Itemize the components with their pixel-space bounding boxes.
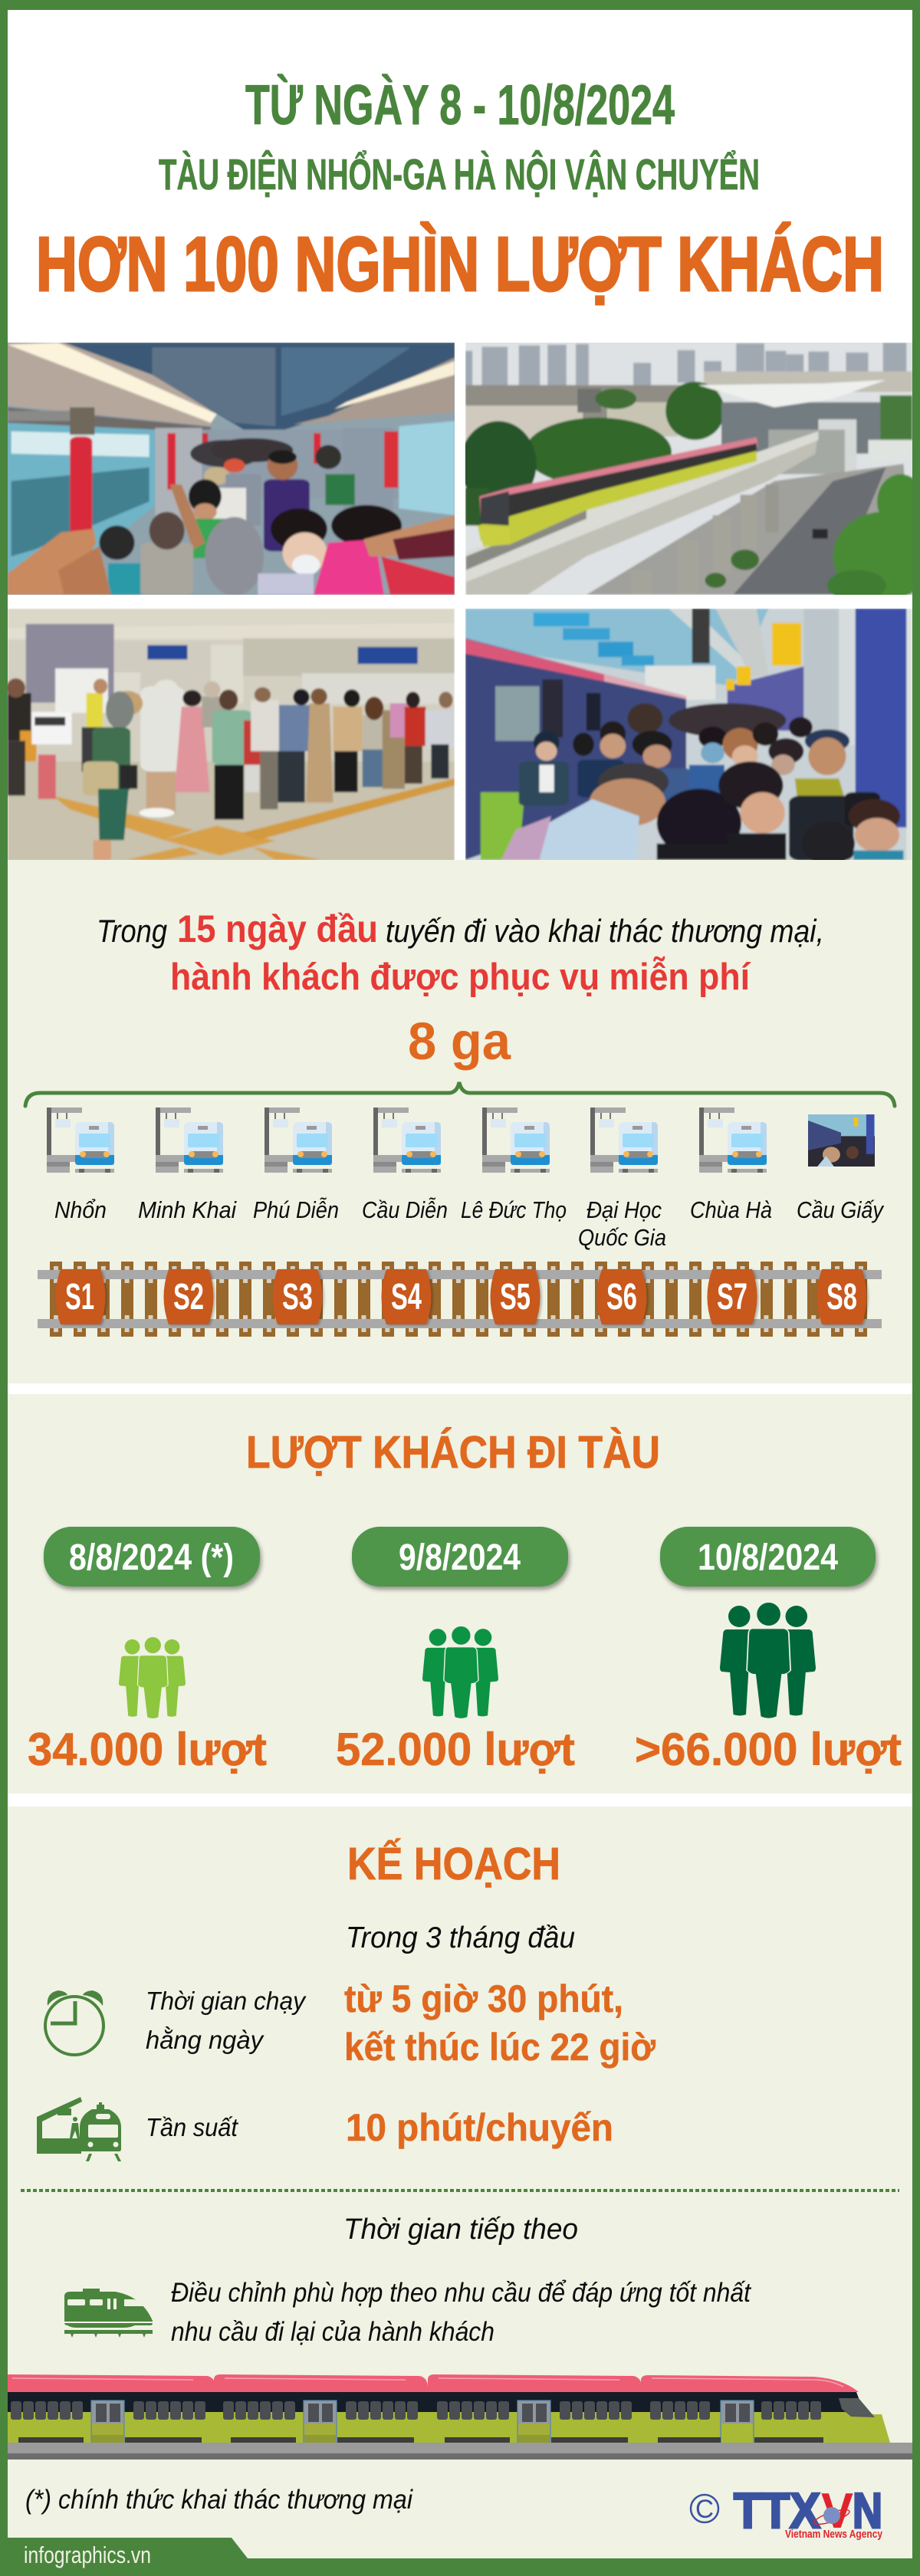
count 34.000: 34.000 lượt: [28, 1724, 267, 1775]
heading: 8 stations: 8 ga: [408, 1012, 511, 1071]
panel: passenger counts: [8, 1394, 912, 1793]
intro text line 1: Trong: [97, 913, 167, 949]
title: [36, 74, 884, 307]
label: frequency: Tần suất: [146, 2113, 239, 2141]
crowd: [190, 440, 261, 468]
footer tab: source: infographics.vn: [24, 2542, 151, 2568]
illustration: metro train: [2, 2374, 912, 2460]
station badges: S3: [282, 1277, 313, 1318]
brace: [25, 1082, 895, 1106]
station labels: Cầu Giấy: [797, 1196, 885, 1223]
station labels: [54, 1196, 885, 1251]
logo: TTXVN: N: [853, 2482, 882, 2538]
heading: passenger counts: LƯỢT KHÁCH ĐI TÀU: [246, 1427, 660, 1478]
icon: alarm clock: [45, 1990, 104, 2055]
icon: station Cầu Diễn: [373, 1108, 441, 1173]
count 52.000: 52.000 lượt: [336, 1724, 575, 1775]
date pill 10/8/2024: [660, 1527, 876, 1587]
footnote: (*) chính thức khai thác thương mại: [25, 2485, 413, 2515]
station badges: S1: [65, 1277, 94, 1318]
logo: TTXVN: V: [821, 2482, 853, 2538]
icon: station Minh Khai: [156, 1108, 223, 1173]
station labels: Cầu Diễn: [362, 1196, 448, 1223]
label: daily running time: hằng ngày: [146, 2026, 264, 2054]
trees right: [833, 512, 920, 601]
panel: plan: [2, 1806, 912, 2558]
icon: train side view: [64, 2289, 153, 2338]
count 66.000: >66.000 lượt: [635, 1724, 902, 1775]
label: daily running time: Thời gian chạy: [146, 1987, 307, 2015]
icon: platform and train: [37, 2097, 121, 2161]
logo: TTXVN: TTX: [734, 2482, 820, 2538]
white inner area: [8, 10, 912, 860]
train: [465, 638, 686, 860]
text: adjust to demand: Điều chỉnh phù hợp theo nhu cầu để đáp ứng tốt nhất: [171, 2278, 751, 2308]
icon: people light green: [119, 1637, 186, 1718]
intro text line 1: [97, 907, 824, 950]
photo: crowd on the platform: [465, 609, 912, 860]
icon: station Phú Diễn: [264, 1108, 332, 1173]
station labels: Minh Khai: [138, 1196, 237, 1223]
intro text line 2: hành khách được phục vụ miễn phí: [170, 957, 751, 998]
icon: people dark green: [720, 1603, 816, 1718]
logo: TTXVN: C: [695, 2495, 714, 2524]
icon: station Nhổn: [47, 1108, 114, 1173]
photo: passengers queuing in station hall: [8, 609, 455, 860]
date pill 9/8/2024: 9/8/2024: [399, 1537, 521, 1578]
value: running hours: từ 5 giờ 30 phút,: [344, 1977, 623, 2020]
icon: station Chùa Hà: [699, 1108, 767, 1173]
value: running hours: [344, 1977, 656, 2069]
photo: crowded train interior: [8, 343, 455, 595]
white gap: [8, 1383, 912, 1394]
station badges: S7: [717, 1277, 748, 1318]
station labels: Đại Học: [586, 1196, 662, 1223]
floor: [8, 761, 455, 861]
intro text line 1: tuyến đi vào khai thác thương mại,: [386, 913, 824, 949]
station labels: Chùa Hà: [690, 1196, 772, 1223]
train: [479, 437, 758, 517]
panel: free service and stations: [8, 860, 912, 1383]
station badges: S2: [173, 1277, 204, 1318]
text: adjust to demand: [171, 2278, 751, 2347]
subheading: first three months: Trong 3 tháng đầu: [346, 1921, 575, 1954]
icon: people medium green: [422, 1626, 498, 1718]
station labels: Lê Đức Thọ: [461, 1196, 567, 1223]
intro text line 1: 15 ngày đầu: [177, 907, 378, 950]
value: frequency: 10 phút/chuyến: [346, 2106, 613, 2149]
logo: TTXVN: Vietnam News Agency: [785, 2528, 883, 2541]
footer tab: source: [0, 2538, 248, 2576]
station labels: Phú Diễn: [253, 1196, 339, 1223]
date pill 10/8/2024: 10/8/2024: [698, 1537, 838, 1578]
icon: station Lê Đức Thọ: [482, 1108, 550, 1173]
logo: TTXVN: [691, 2482, 883, 2541]
icon: station Cầu Giấy photo: [808, 1114, 875, 1167]
white gap: [8, 1793, 912, 1806]
date pill 9/8/2024: [352, 1527, 568, 1587]
icon: station Đại Học Quốc Gia: [590, 1108, 658, 1173]
date pill 8/8/2024: 8/8/2024 (*): [69, 1537, 234, 1578]
station labels: Nhổn: [54, 1196, 107, 1223]
photographer: [106, 691, 134, 729]
ground and road: [586, 464, 912, 595]
value: running hours: kết thúc lúc 22 giờ: [344, 2026, 656, 2069]
heading: plan: KẾ HOẠCH: [347, 1839, 560, 1889]
station badges: S6: [606, 1277, 637, 1318]
station badges: S5: [500, 1277, 531, 1318]
station badges: S8: [826, 1277, 857, 1318]
station badges: [55, 1269, 866, 1324]
crowd: [669, 704, 786, 737]
crowd: [8, 693, 31, 741]
label: daily running time: [146, 1987, 307, 2054]
viaduct: [466, 432, 818, 595]
date pill 8/8/2024: [44, 1527, 260, 1587]
railway track: [38, 1262, 882, 1337]
station labels: Quốc Gia: [578, 1224, 666, 1251]
text: adjust to demand: nhu cầu đi lại của hành khách: [171, 2317, 495, 2347]
photo: elevated train above city: [465, 343, 912, 595]
station badges: S4: [391, 1277, 422, 1318]
title line 1: TỪ NGÀY 8 - 10/8/2024: [245, 74, 675, 136]
subheading: next period: Thời gian tiếp theo: [343, 2213, 578, 2246]
